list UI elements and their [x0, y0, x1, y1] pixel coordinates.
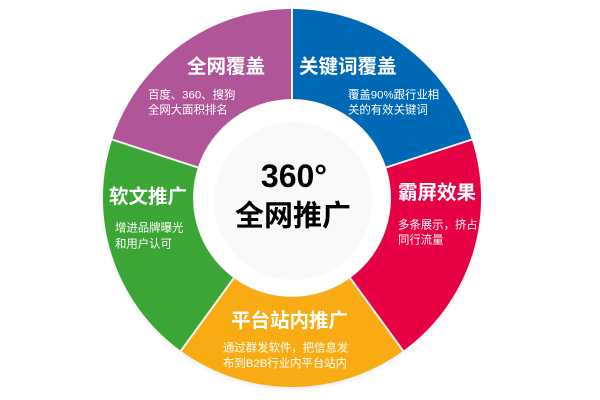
- text: 霸屏效果 description: [398, 218, 478, 246]
- text: 关键词覆盖 description: [348, 88, 439, 116]
- center title: 全网推广: 全网推广: [235, 200, 351, 232]
- text: 软文推广 description: 和用户认可: [115, 236, 172, 250]
- panel: 霸屏效果: [350, 140, 481, 351]
- text: 全网覆盖 description: 全网大面积排名: [148, 102, 228, 116]
- text: 软文推广 description: [115, 220, 183, 250]
- text: 全网覆盖 description: 百度、360、搜狗: [148, 88, 235, 102]
- text: 平台站内推广 description: 通过群发软件，把信息发: [223, 340, 348, 354]
- center title: 360°: 360°: [261, 158, 327, 194]
- text: 平台站内推广 description: 布到B2B行业内平台站内: [223, 356, 347, 370]
- heading: 霸屏效果: 霸屏效果: [398, 182, 477, 204]
- panel: 关键词覆盖: [292, 9, 472, 167]
- text: 关键词覆盖 description: 覆盖90%跟行业相: [348, 88, 439, 102]
- text: 关键词覆盖 description: 关的有效关键词: [348, 102, 428, 116]
- text: 全网覆盖 description: [148, 88, 235, 116]
- center circle: [194, 100, 390, 296]
- text: 霸屏效果 description: 同行流量: [398, 232, 444, 246]
- heading: 平台站内推广: 平台站内推广: [231, 309, 348, 332]
- heading: 软文推广: 软文推广: [109, 185, 187, 208]
- panel: 平台站内推广: [181, 278, 403, 387]
- text: 平台站内推广 description: [223, 340, 348, 370]
- heading: 关键词覆盖: 关键词覆盖: [299, 55, 397, 78]
- text: 霸屏效果 description: 多条展示，挤占: [398, 218, 478, 232]
- text: 软文推广 description: 增进品牌曝光: [115, 220, 183, 234]
- panel: 全网覆盖: [112, 9, 292, 167]
- heading: 全网覆盖: 全网覆盖: [187, 55, 265, 78]
- panel: 软文推广: [103, 140, 234, 351]
